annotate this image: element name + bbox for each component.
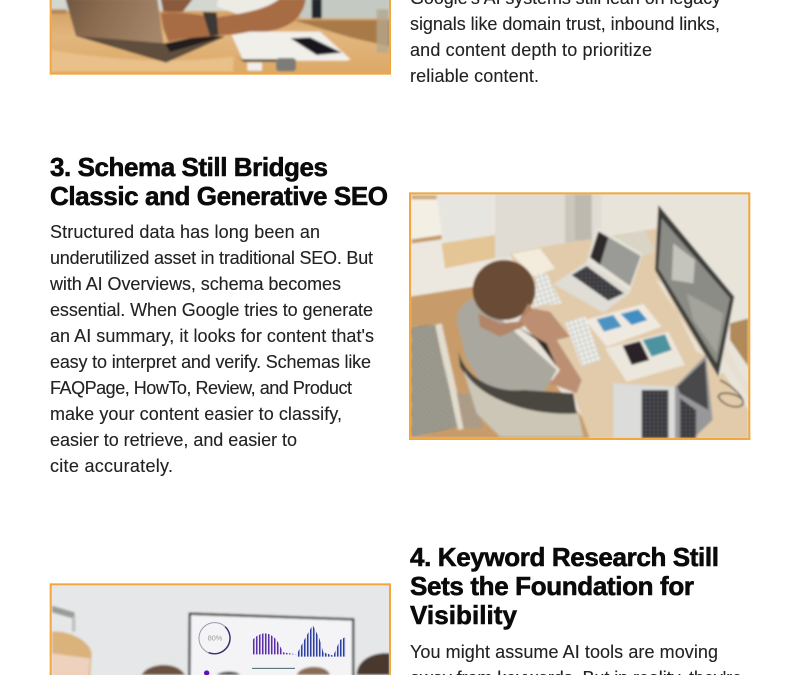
text block: schema paragraph: with AI Overviews, schema becomes: [49, 274, 341, 294]
text block: schema paragraph: FAQPage, HowTo, Review, and Product: [50, 378, 352, 398]
text block: legacy signals paragraph: reliable content.: [410, 66, 539, 86]
heading: section 3: 3. Schema Still Bridges: [50, 152, 328, 182]
photo: man working at desk with laptops and monitor: [409, 193, 751, 439]
text block: legacy signals paragraph: signals like domain trust, inbound links,: [410, 14, 720, 34]
text block: schema paragraph: cite accurately.: [50, 456, 173, 476]
text block: legacy signals paragraph: [410, 0, 721, 86]
photo border: [51, 0, 390, 74]
text block: schema paragraph: Structured data has long been an: [50, 222, 320, 242]
text block: schema paragraph: make your content easier to classify,: [50, 404, 342, 424]
heading: section 4: 4. Keyword Research Still: [410, 542, 719, 572]
text block: legacy signals paragraph: and content depth to prioritize: [410, 40, 652, 60]
photo: team looking at analytics dashboard on a wall screen: [50, 584, 391, 675]
heading: section 4: Visibility: [410, 600, 518, 630]
text block: schema paragraph: essential. When Google tries to generate: [50, 300, 373, 320]
text block: keyword research paragraph: [410, 642, 742, 675]
text block: schema paragraph: easier to retrieve, and easier to: [50, 430, 297, 450]
text block: schema paragraph: easy to interpret and verify. Schemas like: [50, 352, 371, 372]
text block: keyword research paragraph: You might assume AI tools are moving: [410, 642, 718, 662]
dashboard gauge: 80%: [208, 634, 223, 643]
photo: person typing on a laptop at a wooden desk: [50, 0, 391, 75]
photo border: [410, 193, 749, 439]
heading: section 3: [50, 152, 388, 211]
heading: section 4: [410, 542, 719, 630]
text block: schema paragraph: an AI summary, it looks for content that's: [50, 326, 374, 346]
dashboard gauge: [199, 623, 232, 655]
text block: schema paragraph: underutilized asset in traditional SEO. But: [50, 248, 373, 268]
photo border: [51, 584, 390, 675]
heading: section 3: Classic and Generative SEO: [50, 181, 388, 211]
text block: schema paragraph: [49, 222, 374, 476]
heading: section 4: Sets the Foundation for: [410, 571, 694, 601]
dashboard bar chart: [252, 625, 346, 657]
